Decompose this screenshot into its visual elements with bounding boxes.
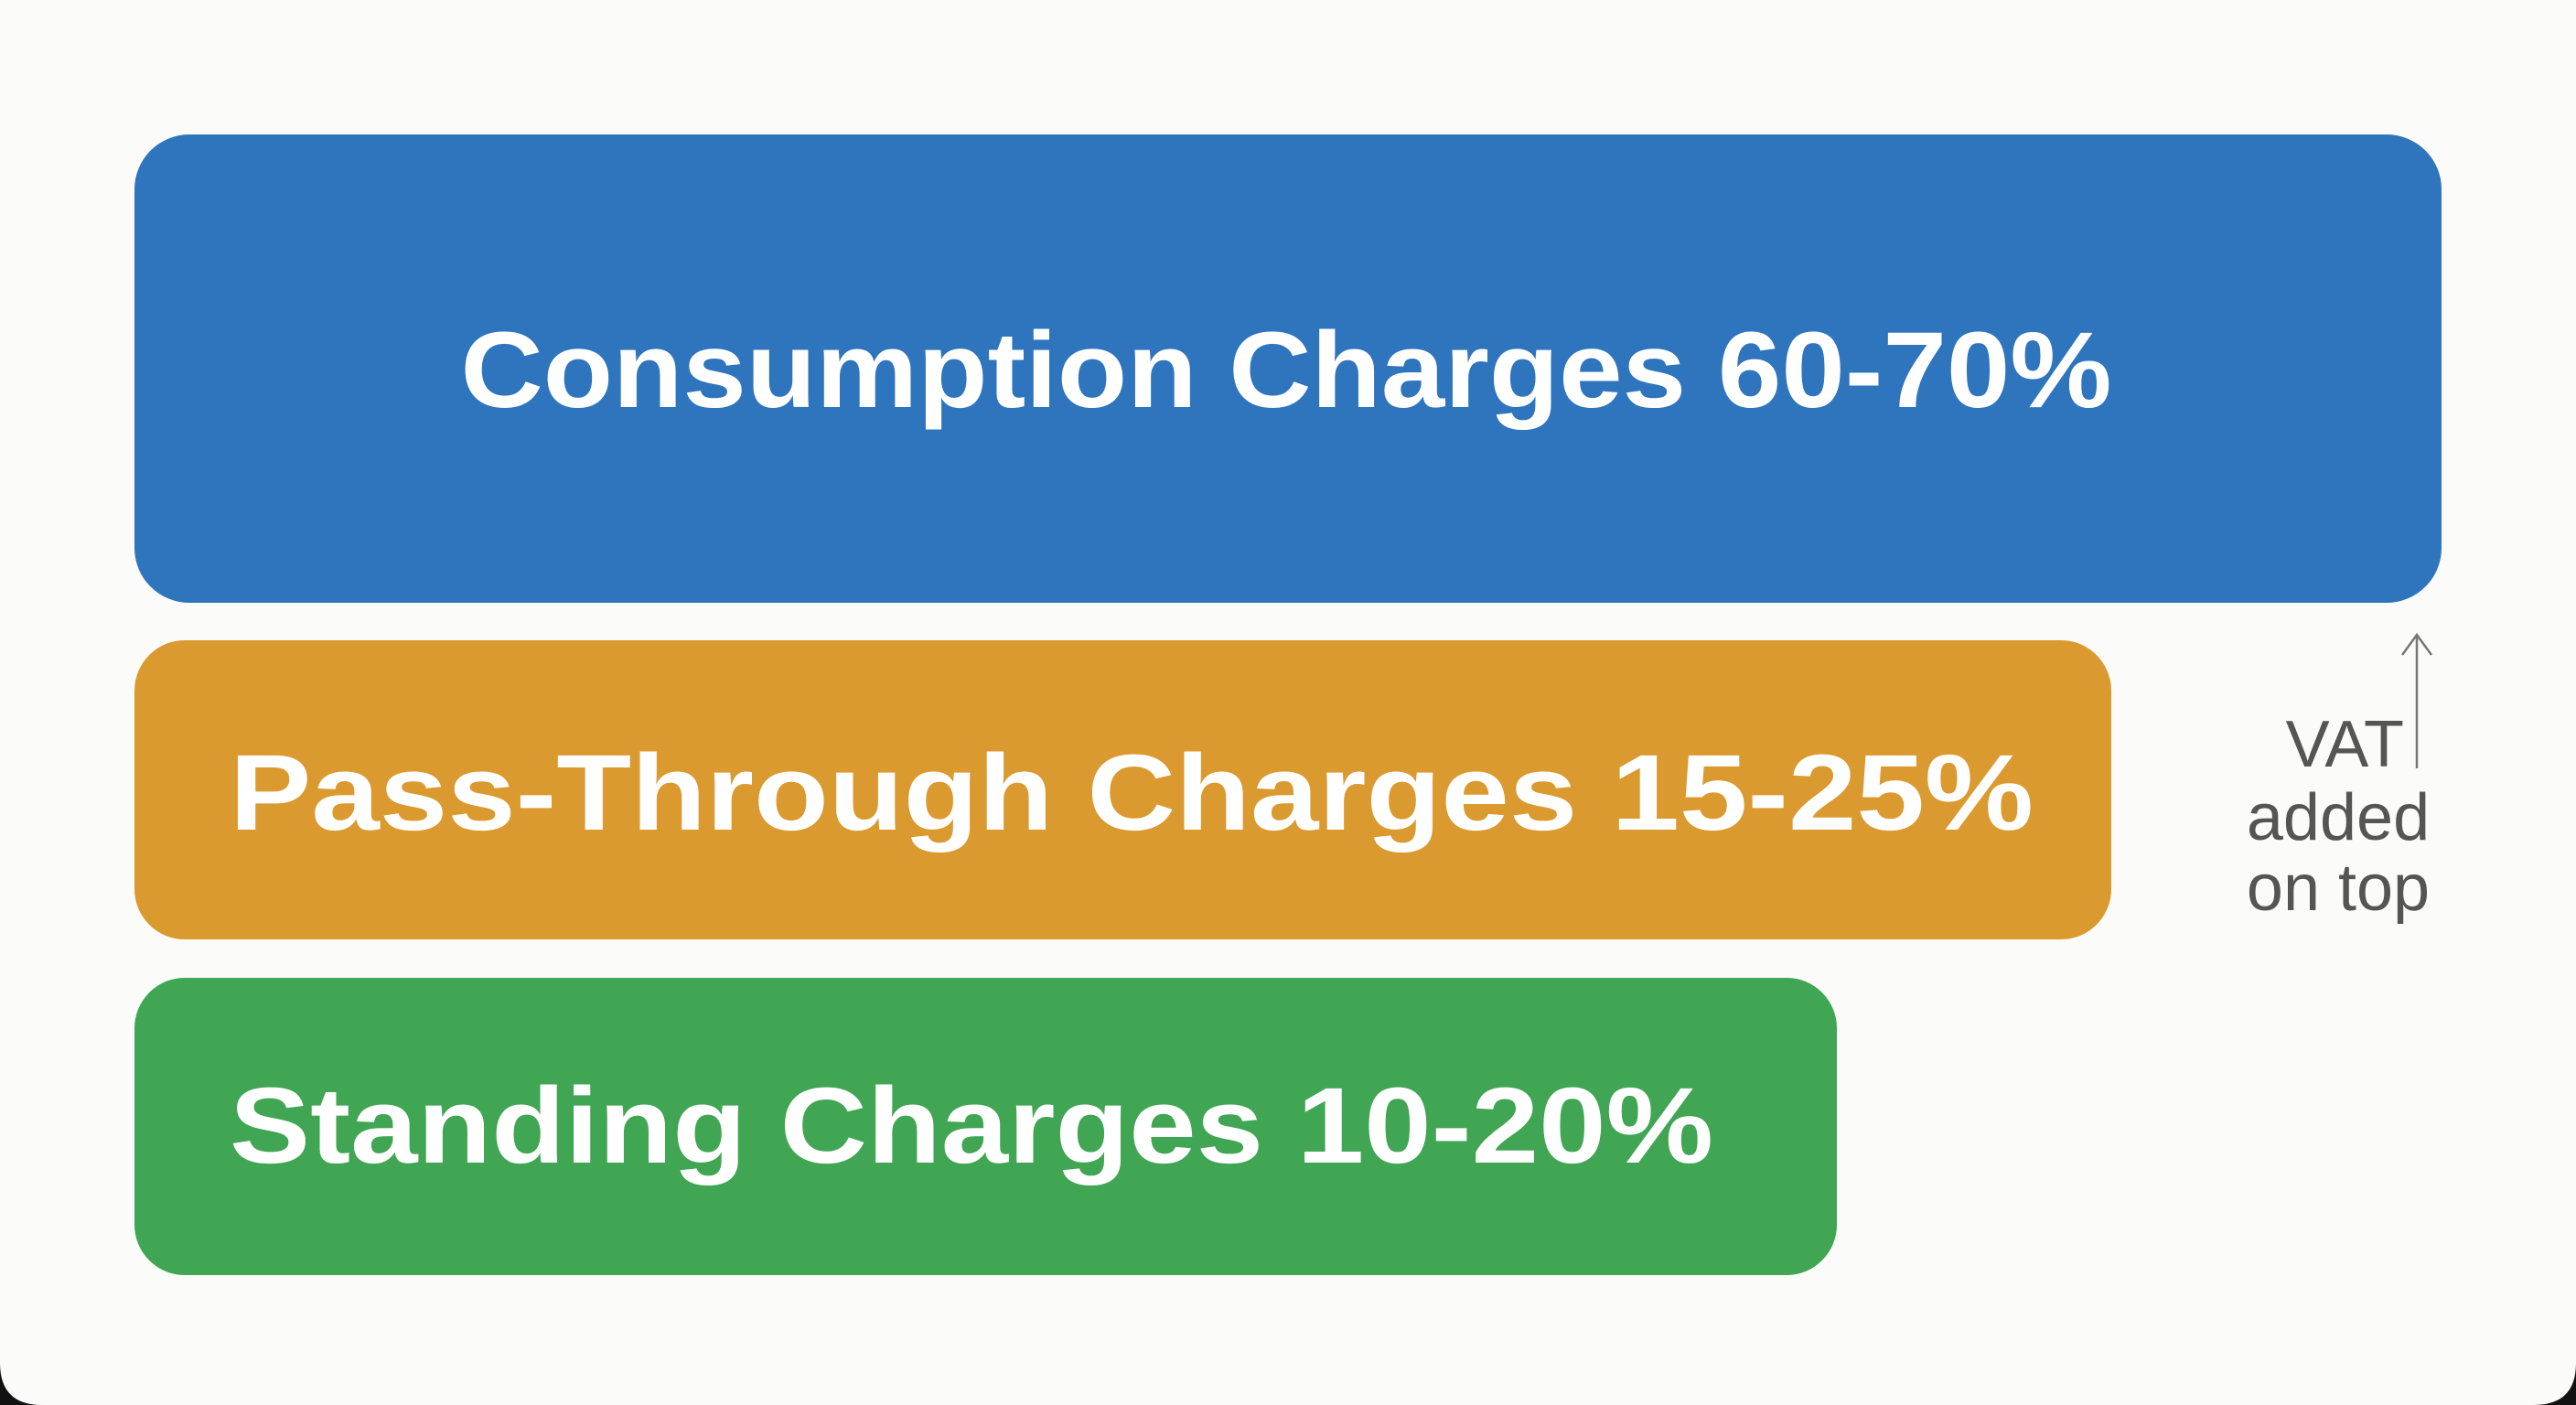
bar: standing charges: Standing Charges 10-20% (230, 1066, 1713, 1186)
VAT note: added (2247, 781, 2430, 854)
arrow: VAT upward (2402, 635, 2431, 768)
bar: consumption charges: Consumption Charges 60-70% (461, 310, 2111, 431)
VAT note: VAT (2286, 708, 2404, 781)
VAT note (2247, 708, 2430, 925)
bar: pass-through charges: Pass-Through Charges 15-25% (230, 733, 2034, 853)
bar: standing charges (134, 978, 1837, 1275)
VAT note: on top (2247, 852, 2430, 925)
bar: consumption charges (134, 134, 2442, 603)
bar: pass-through charges (134, 640, 2111, 939)
